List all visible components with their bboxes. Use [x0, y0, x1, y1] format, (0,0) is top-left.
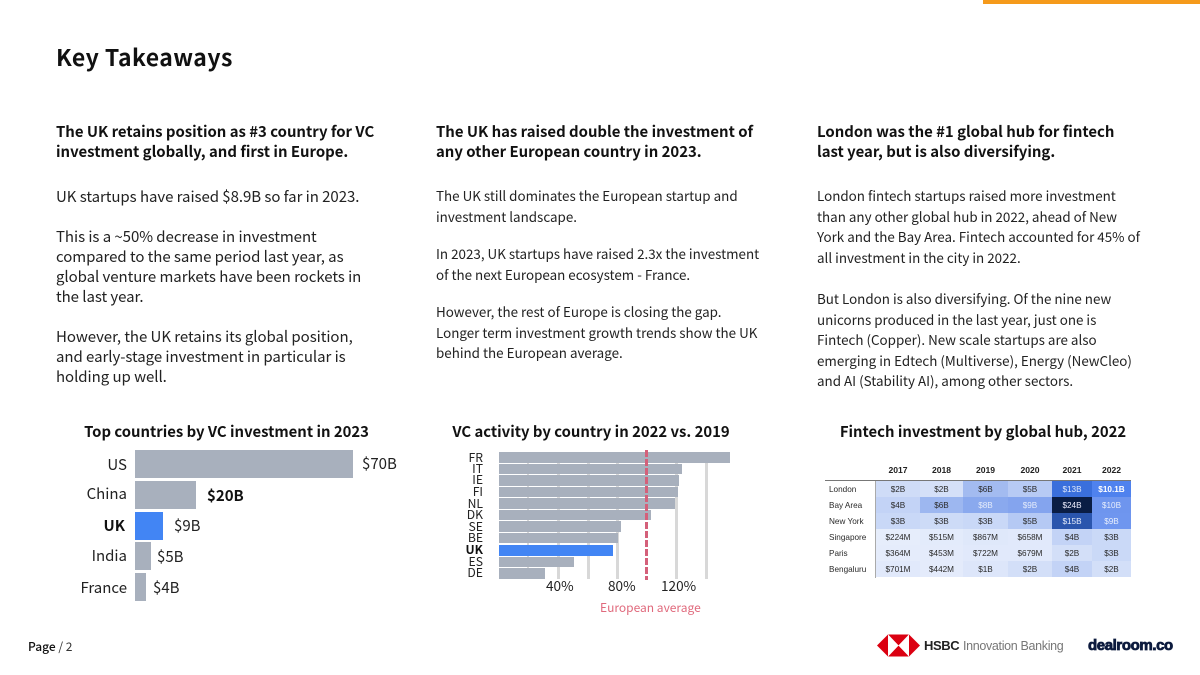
- logo text: HSBC Innovation Banking: HSBC: [924, 638, 959, 653]
- heatmap table: fintech investment by hub: $15B: [1062, 517, 1082, 526]
- column 2 body text: of the next European ecosystem - France.: [436, 264, 690, 284]
- column 1 heading: investment globally, and first in Europe.: [56, 141, 348, 162]
- chart title: VC activity: VC activity by country in 2022 vs. 2019: [452, 421, 730, 442]
- bar chart: VC activity by country: 120%: [661, 575, 696, 595]
- heatmap table: fintech investment by hub: $10B: [1102, 501, 1121, 510]
- bar chart: VC activity by country: DK: [467, 505, 483, 523]
- bar chart: VC activity by country: FI: [473, 482, 483, 500]
- heatmap table: fintech investment by hub: $5B: [1023, 517, 1037, 526]
- heatmap table: fintech investment by hub: $5B: [1023, 485, 1037, 494]
- column 2 body text: However, the rest of Europe is closing the gap.: [436, 301, 722, 321]
- column 2 body text: The UK still dominates the European startup and: [436, 185, 738, 205]
- heatmap table: fintech investment by hub: $9B: [1104, 517, 1119, 526]
- bar chart: VC activity by country: European average: [600, 599, 701, 616]
- heatmap table: fintech investment by hub: $3B: [934, 517, 949, 526]
- heatmap table: fintech investment by hub: Paris: [829, 549, 848, 558]
- heatmap table: fintech investment by hub: Bengaluru: [829, 565, 866, 574]
- heatmap table: fintech investment by hub: $9B: [1023, 501, 1037, 510]
- column 3 body text: all investment in the city in 2022.: [817, 247, 1021, 267]
- column 1 body text: This is a ~50% decrease in investment: [56, 226, 317, 247]
- heatmap table: fintech investment by hub: $3B: [1104, 533, 1119, 542]
- column 1 heading: [56, 121, 374, 162]
- heatmap table: fintech investment by hub: $1B: [978, 565, 993, 574]
- column 2 heading: The UK has raised double the investment of: [436, 121, 753, 142]
- column 2 body text: Longer term investment growth trends show the UK: [436, 322, 757, 342]
- heatmap table: fintech investment by hub: $224M: [885, 533, 911, 542]
- heatmap table: fintech investment by hub: $2B: [1065, 549, 1079, 558]
- column 3 body text: unicorns produced in the last year, just one is: [817, 309, 1096, 329]
- heatmap table: fintech investment by hub: $2B: [891, 485, 905, 494]
- heatmap table: fintech investment by hub: $867M: [973, 533, 998, 542]
- logo text: HSBC Innovation Banking: Innovation Banking: [963, 639, 1063, 653]
- bar chart: VC activity by country: [466, 448, 730, 616]
- column 2 body text: behind the European average.: [436, 342, 623, 362]
- column 1 body text: compared to the same period last year, as: [56, 246, 344, 267]
- column 1 body text: global venture markets have been rockets in: [56, 266, 361, 287]
- heatmap table: fintech investment by hub: Bay Area: [829, 501, 862, 510]
- heatmap table: fintech investment by hub: London: [829, 485, 856, 494]
- icon: HSBC logo: [877, 634, 920, 656]
- chart title: top countries: Top countries by VC investment in 2023: [84, 421, 369, 442]
- bar chart: VC activity by country: SE: [469, 517, 483, 535]
- heatmap table: fintech investment by hub: $13B: [1062, 485, 1082, 494]
- heatmap table: fintech investment by hub: Singapore: [829, 533, 866, 542]
- bar chart: top countries: China: [87, 483, 127, 504]
- heatmap table: fintech investment by hub: 2021: [1062, 465, 1082, 475]
- column 1 body text: [56, 186, 361, 387]
- heatmap table: fintech investment by hub: 2020: [1020, 465, 1040, 475]
- column 3 body text: [817, 185, 1140, 390]
- bar chart: top countries: UK: [103, 515, 125, 536]
- bar chart: top countries: $70B: [362, 453, 397, 474]
- chart title: fintech heatmap: Fintech investment by global hub, 2022: [840, 421, 1126, 442]
- heatmap table: fintech investment by hub: $24B: [1062, 501, 1082, 510]
- heatmap table: fintech investment by hub: $4B: [1065, 533, 1079, 542]
- bar chart: VC activity by country: IE: [472, 470, 483, 488]
- column 3 body text: London fintech startups raised more investment: [817, 185, 1116, 205]
- column 3 body text: But London is also diversifying. Of the nine new: [817, 288, 1111, 308]
- column 2 body text: [436, 185, 759, 362]
- heatmap table: fintech investment by hub: 2017: [888, 465, 908, 475]
- heatmap table: fintech investment by hub: $515M: [929, 533, 954, 542]
- bar chart: VC activity by country: NL: [468, 494, 483, 512]
- column 2 body text: In 2023, UK startups have raised 2.3x the investment: [436, 243, 759, 263]
- bar chart: top countries: India: [92, 545, 127, 566]
- heatmap table: fintech investment by hub: $3B: [1104, 549, 1119, 558]
- bar chart: VC activity by country: IT: [472, 459, 483, 477]
- heatmap table: fintech investment by hub: $3B: [891, 517, 905, 526]
- heatmap table: fintech investment by hub: $4B: [891, 501, 905, 510]
- column 2 heading: [436, 121, 754, 162]
- column 3 heading: last year, but is also diversifying.: [817, 141, 1055, 162]
- orange top accent bar: [983, 0, 1200, 4]
- column 1 body text: holding up well.: [56, 366, 167, 387]
- bar chart: VC activity by country: BE: [468, 528, 483, 546]
- heatmap table: fintech investment by hub: $2B: [1023, 565, 1037, 574]
- column 2 heading: any other European country in 2023.: [436, 141, 702, 162]
- heatmap table: fintech investment by hub: New York: [829, 517, 864, 526]
- heatmap table: fintech investment by hub: $2B: [1104, 565, 1119, 574]
- bar chart: top countries: $9B: [174, 515, 201, 536]
- column 1 body text: and early-stage investment in particular is: [56, 346, 346, 367]
- bar chart: VC activity by country: 80%: [608, 575, 636, 595]
- bar chart: VC activity by country: 40%: [546, 575, 574, 595]
- bar chart: VC activity by country: UK: [466, 540, 483, 558]
- heatmap table: fintech investment by hub: $679M: [1017, 549, 1043, 558]
- heatmap table: fintech investment by hub: 2022: [1102, 465, 1121, 475]
- bar chart: top countries: $20B: [207, 485, 244, 506]
- heatmap table: fintech investment by hub: $453M: [929, 549, 954, 558]
- bar chart: VC activity by country: FR: [469, 448, 483, 466]
- column 1 body text: UK startups have raised $8.9B so far in 2023.: [56, 186, 359, 207]
- heatmap table: fintech investment by hub: 2019: [976, 465, 995, 475]
- heatmap table: fintech investment by hub: $6B: [978, 485, 993, 494]
- bar chart: top countries: [80, 450, 397, 601]
- bar chart: VC activity by country: DE: [467, 563, 483, 581]
- column 1 body text: the last year.: [56, 286, 143, 307]
- column 3 body text: and AI (Stability AI), among other sectors.: [817, 370, 1073, 390]
- column 1 body text: However, the UK retains its global position,: [56, 326, 353, 347]
- column 3 body text: Fintech (Copper). New scale startups are also: [817, 329, 1097, 349]
- page number: Page / 2: [28, 638, 72, 655]
- bar chart: VC activity by country: ES: [469, 552, 483, 570]
- heatmap table: fintech investment by hub: $6B: [934, 501, 949, 510]
- heatmap table: fintech investment by hub: $722M: [973, 549, 998, 558]
- column 3 body text: than any other global hub in 2022, ahead of New: [817, 206, 1117, 226]
- bar chart: top countries: France: [80, 577, 127, 598]
- column 1 heading: The UK retains position as #3 country for VC: [56, 121, 374, 142]
- logo text: dealroom.co: dealroom.co: [1088, 637, 1173, 654]
- heatmap table: fintech investment by hub: $364M: [885, 549, 911, 558]
- bar chart: top countries: $5B: [157, 546, 184, 567]
- heatmap table: fintech investment by hub: $3B: [978, 517, 993, 526]
- bar chart: top countries: $4B: [153, 577, 180, 598]
- heatmap table: fintech investment by hub: $2B: [934, 485, 949, 494]
- title: Key Takeaways: [56, 39, 233, 73]
- column 3 body text: York and the Bay Area. Fintech accounted for 45% of: [817, 226, 1140, 246]
- heatmap table: fintech investment by hub: $658M: [1017, 533, 1043, 542]
- heatmap table: fintech investment by hub: $442M: [929, 565, 954, 574]
- logo text: HSBC Innovation Banking: [924, 638, 1063, 653]
- column 3 body text: emerging in Edtech (Multiverse), Energy (NewCleo): [817, 350, 1132, 370]
- heatmap table: fintech investment by hub: $701M: [885, 565, 911, 574]
- heatmap table: fintech investment by hub: $8B: [978, 501, 993, 510]
- column 2 body text: investment landscape.: [436, 206, 577, 226]
- heatmap table: fintech investment by hub: $4B: [1065, 565, 1079, 574]
- bar chart: top countries: US: [107, 454, 127, 475]
- heatmap table: fintech investment by hub: $10.1B: [1098, 485, 1125, 494]
- heatmap table: fintech investment by hub: 2018: [932, 465, 951, 475]
- column 3 heading: [817, 121, 1114, 162]
- column 3 heading: London was the #1 global hub for fintech: [817, 121, 1114, 142]
